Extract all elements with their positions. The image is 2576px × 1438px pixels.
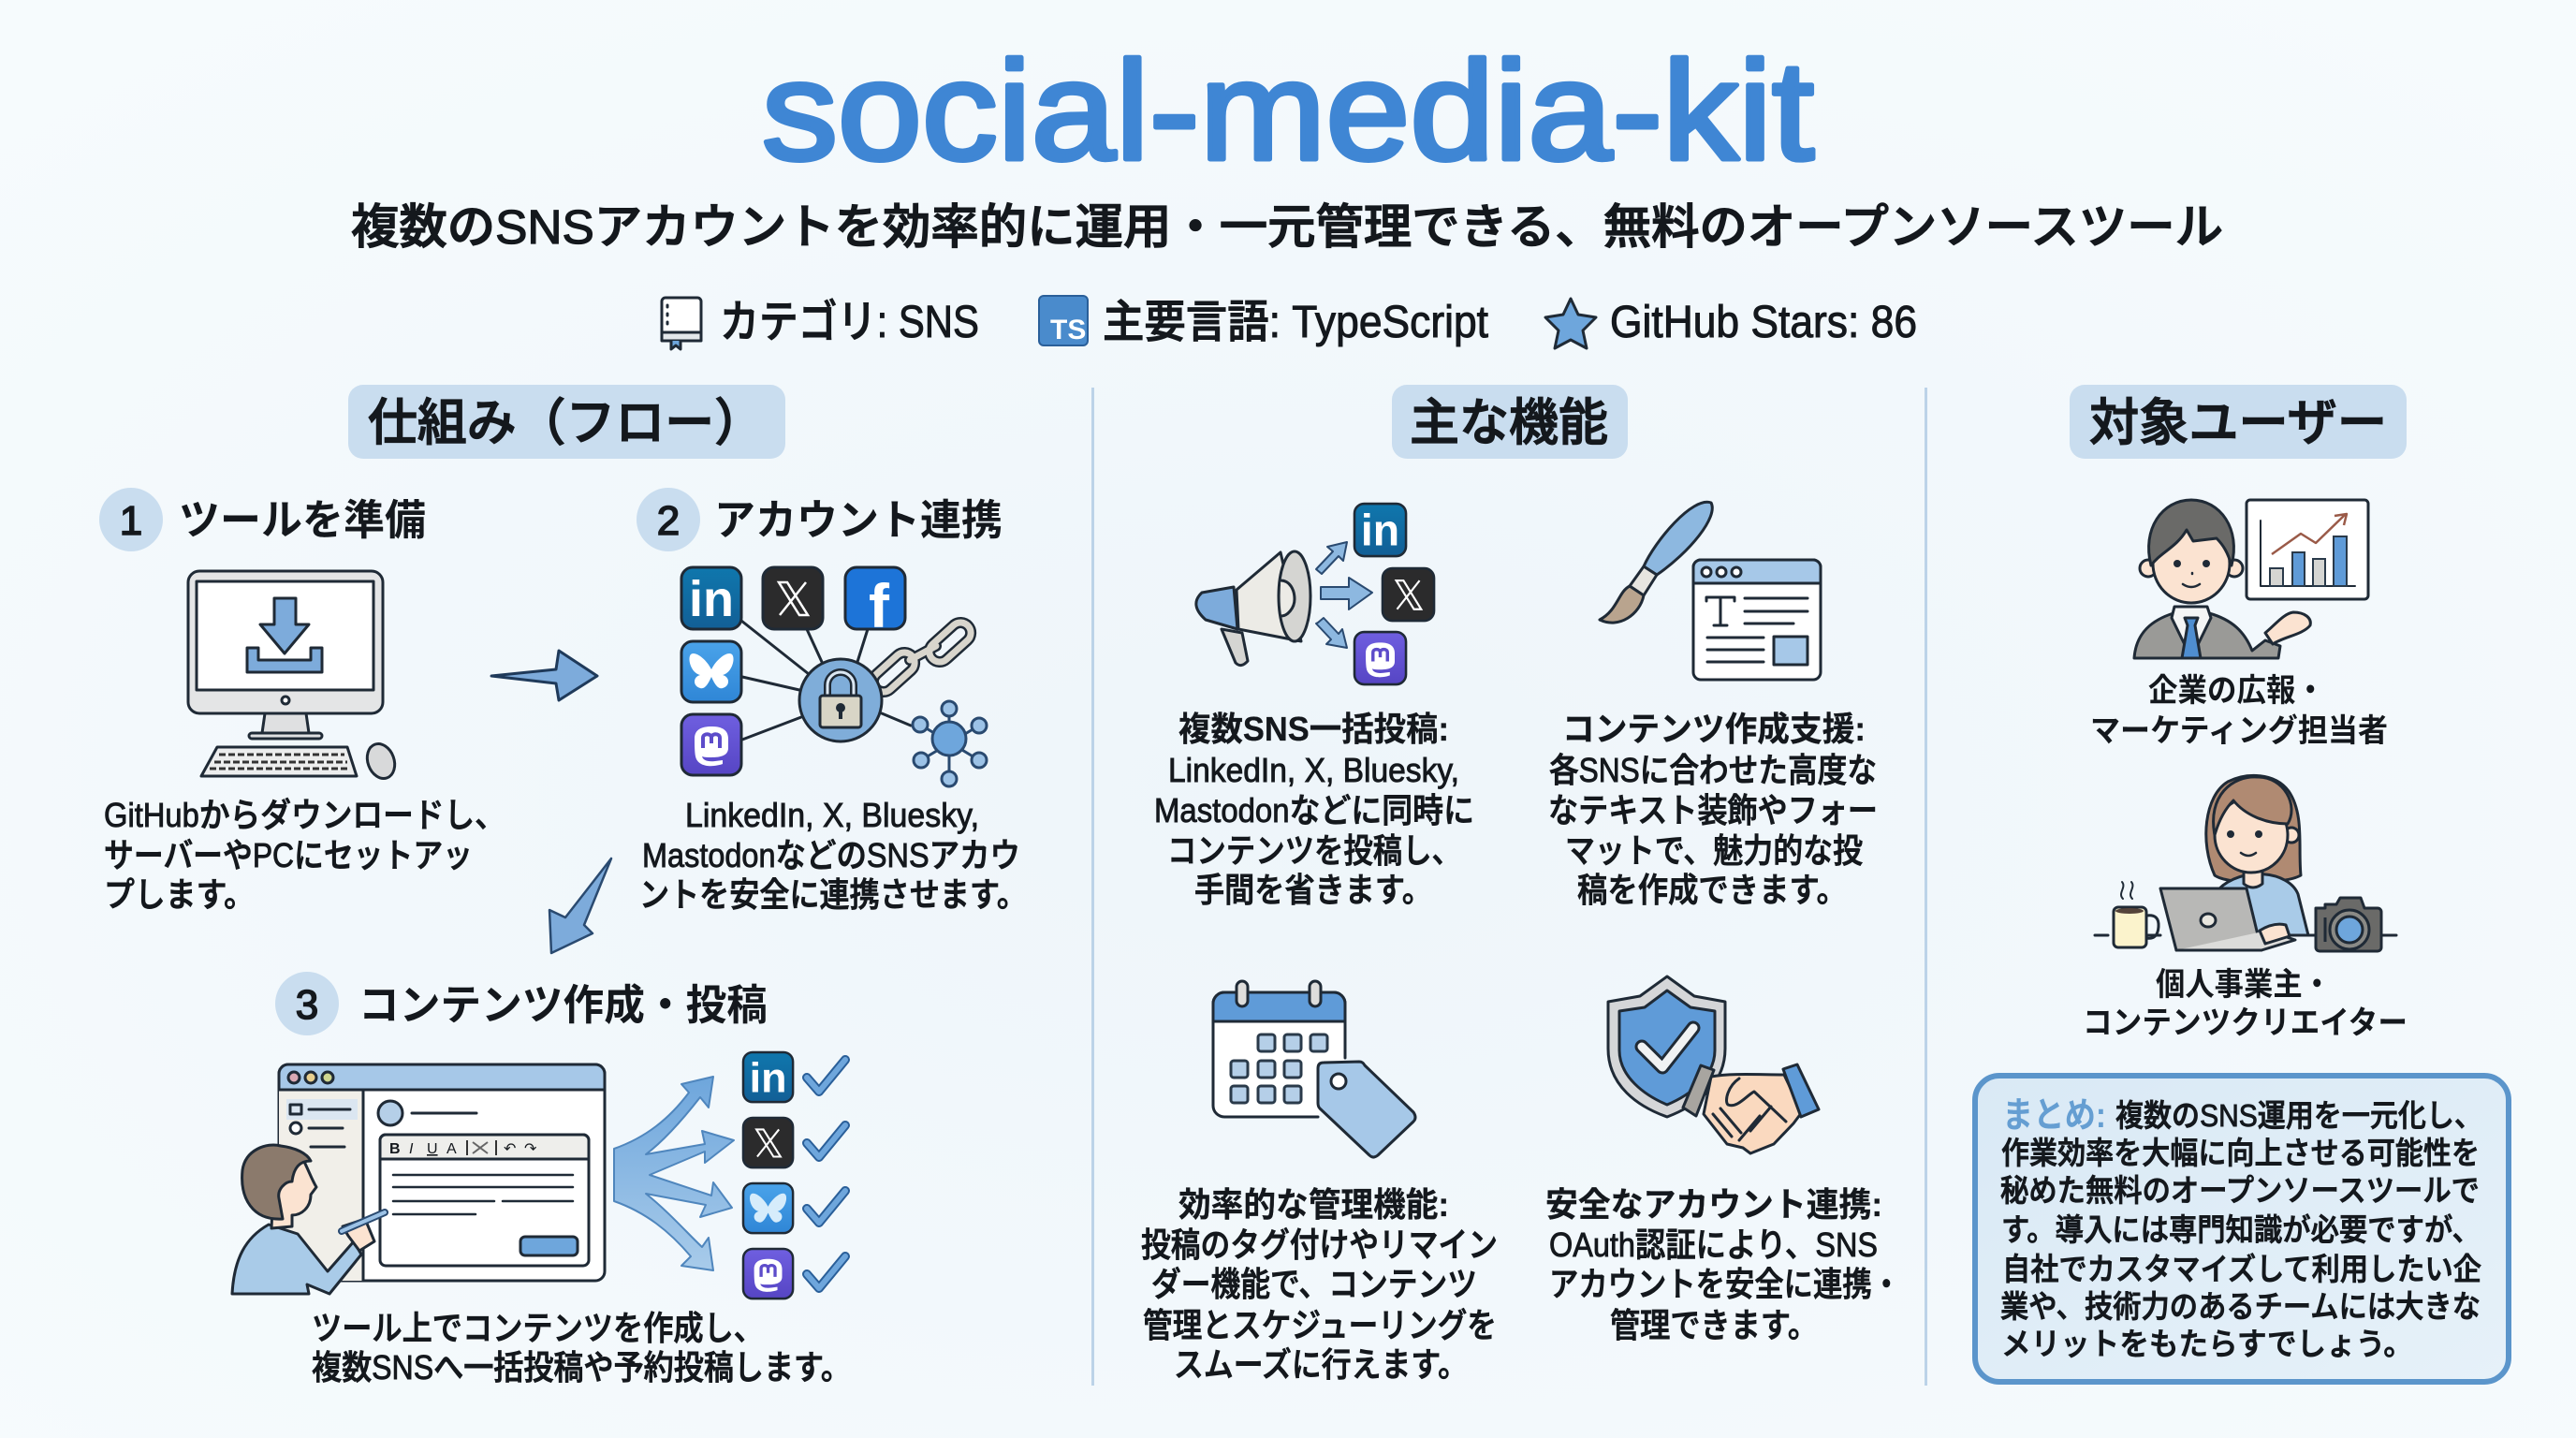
step 1 description [104,796,505,914]
step 1 description: サーバーやPCにセットアッ [104,836,473,874]
callout: summary: 秘めた無料のオープンソースツールで [2000,1173,2480,1208]
subtitle: 複数のSNSアカウントを効率的に運用・一元管理できる、無料のオープンソースツール [351,200,2223,254]
feature text: efficient management: ダー機能で、コンテンツ [1151,1265,1477,1303]
icons: check marks [807,1060,845,1288]
feature text: content creation: コンテンツ作成支援: [1562,710,1866,748]
feature text: efficient management: 効率的な管理機能: [1178,1185,1449,1224]
feature text: bulk posting: Mastodonなどに同時に [1154,791,1474,829]
illustration: editor window [279,1064,605,1281]
GitHub stars label: GitHub Stars: 86 [1610,298,1917,347]
feature text: bulk posting [1154,710,1474,909]
icon: network [913,701,987,786]
icon: brush and document [1600,502,1821,680]
diagram: secure account linking [681,567,987,786]
callout: summary: 作業効率を大幅に向上させる可能性を [2001,1136,2480,1170]
step 2 heading [637,488,1003,551]
step 3 heading: コンテンツ作成・投稿 [359,981,768,1029]
feature text: content creation: マットで、魅力的な投 [1565,831,1863,870]
step 1 heading [99,488,426,551]
metadata row [662,296,1917,349]
arrows: one-to-many publishing [614,1077,734,1270]
step 2 description [639,796,1027,914]
callout: summary: 複数のSNS運用を一元化し、 [2115,1098,2482,1133]
label: marketing staff: マーケティング担当者 [2090,713,2388,749]
icon: TypeScript: TS [1050,315,1086,345]
divider [1091,388,1094,1386]
feature text: secure linking: OAuth認証により、SNS [1549,1225,1878,1264]
feature text: secure linking: 管理できます。 [1610,1306,1818,1344]
step 3 description: ツール上でコンテンツを作成し、 [312,1309,764,1347]
label: creators [2083,967,2408,1041]
language label: 主要言語: TypeScript [1103,298,1488,347]
icon: LinkedIn: in [689,571,734,627]
icon: LinkedIn: in [750,1054,786,1101]
label: marketing staff: 企業の広報・ [2148,673,2325,709]
icon: Bluesky [681,641,741,702]
illustration: editor window: U [427,1141,438,1157]
icon: TypeScript [1039,296,1088,345]
step 2 description: LinkedIn, X, Bluesky, [685,796,979,834]
step 3 description [312,1309,851,1387]
illustration: person typing [232,1145,385,1294]
illustration: editor window: B [389,1141,401,1157]
feature text: efficient management: 管理とスケジューリングを [1143,1306,1497,1344]
panel: target users [1975,385,2509,1382]
icon: lock [799,659,882,741]
icon: LinkedIn: in [1361,506,1399,555]
icon: X [763,567,823,629]
icon: X [743,1118,793,1167]
icon: megaphone to social networks [1196,504,1434,684]
icon: Mastodon [743,1249,793,1299]
category label: カテゴリ: SNS [720,298,979,347]
step 2 description: ントを安全に連携させます。 [639,875,1027,914]
feature text: content creation: なテキスト装飾やフォー [1548,791,1878,829]
callout: summary: まとめ: [2002,1096,2106,1136]
callout: summary: 業や、技術力のあるチームには大きな [2000,1289,2481,1324]
step 2 heading: 2 [657,498,680,544]
step 1 description: プします。 [104,875,255,914]
heading: flow: 仕組み（フロー） [368,395,764,451]
callout: summary: メリットをもたらすでしょう。 [2001,1327,2413,1361]
icon: notebook [662,298,701,349]
step 1 description: GitHubからダウンロードし、 [104,796,505,834]
arrow: step 2 to step 3 [549,858,611,953]
heading: features [1392,385,1628,459]
label: creators: コンテンツクリエイター [2083,1005,2408,1041]
feature text: bulk posting: 手間を省きます。 [1194,871,1432,909]
callout: summary [1975,1076,2509,1382]
label: creators: 個人事業主・ [2156,967,2332,1003]
illustration: editor window: ↷ [524,1141,537,1157]
step 1 heading: ツールを準備 [179,496,426,544]
step 3 description: 複数SNSへ一括投稿や予約投稿します。 [312,1348,851,1387]
feature text: bulk posting: コンテンツを投稿し、 [1167,831,1461,870]
illustration: creator with laptop [2095,775,2396,951]
icon: desktop computer [188,571,400,783]
icon: LinkedIn [681,567,741,629]
icon: Facebook: f [869,571,890,640]
feature text: secure linking [1545,1185,1901,1344]
step 3 heading: 3 [296,982,318,1028]
feature text: content creation: 稿を作成できます。 [1577,871,1847,909]
feature text: content creation [1548,710,1878,909]
illustration: marketing person with chart [2134,500,2368,658]
title: social-media-kit [762,32,1814,189]
feature text: secure linking: 安全なアカウント連携: [1545,1185,1882,1224]
icon: star [1545,299,1596,348]
step 1 heading: 1 [120,498,142,544]
illustration: editor window: A [446,1141,457,1157]
step 2 heading: アカウント連携 [714,496,1003,544]
feature text: bulk posting: 複数SNS一括投稿: [1178,710,1449,748]
panel: features [1141,385,1901,1384]
heading: target users [2070,385,2407,459]
step 3 heading [275,972,768,1035]
icon: calendar and tag [1213,981,1415,1157]
arrow: step 1 to step 2 [491,651,597,700]
icon: Mastodon [1354,632,1406,684]
feature text: secure linking: アカウントを安全に連携・ [1549,1265,1901,1303]
publish targets [743,1052,845,1299]
icon: shield and handshake [1608,976,1819,1153]
feature text: bulk posting: LinkedIn, X, Bluesky, [1168,751,1459,789]
heading: features: 主な機能 [1410,395,1608,451]
step 2 description: MastodonなどのSNSアカウ [642,836,1020,874]
illustration: editor window: ↶ [504,1141,516,1157]
label: marketing staff [2090,673,2388,749]
callout: summary: 自社でカスタマイズして利用したい企 [2002,1252,2481,1286]
illustration: editor window: I [409,1141,414,1157]
feature text: efficient management [1141,1185,1498,1384]
callout: summary: す。導入には専門知識が必要ですが、 [2001,1212,2481,1247]
feature text: efficient management: 投稿のタグ付けやリマイン [1141,1225,1498,1264]
heading: target users: 対象ユーザー [2089,395,2387,451]
icon: Bluesky [743,1183,793,1233]
feature text: content creation: 各SNSに合わせた高度な [1549,751,1877,789]
icon: X [1383,568,1434,621]
icon: Mastodon [681,714,741,775]
feature text: efficient management: スムーズに行えます。 [1174,1345,1468,1384]
icon: chain [869,618,975,697]
icon: Facebook [845,567,905,640]
panel: flow [99,385,1027,1387]
